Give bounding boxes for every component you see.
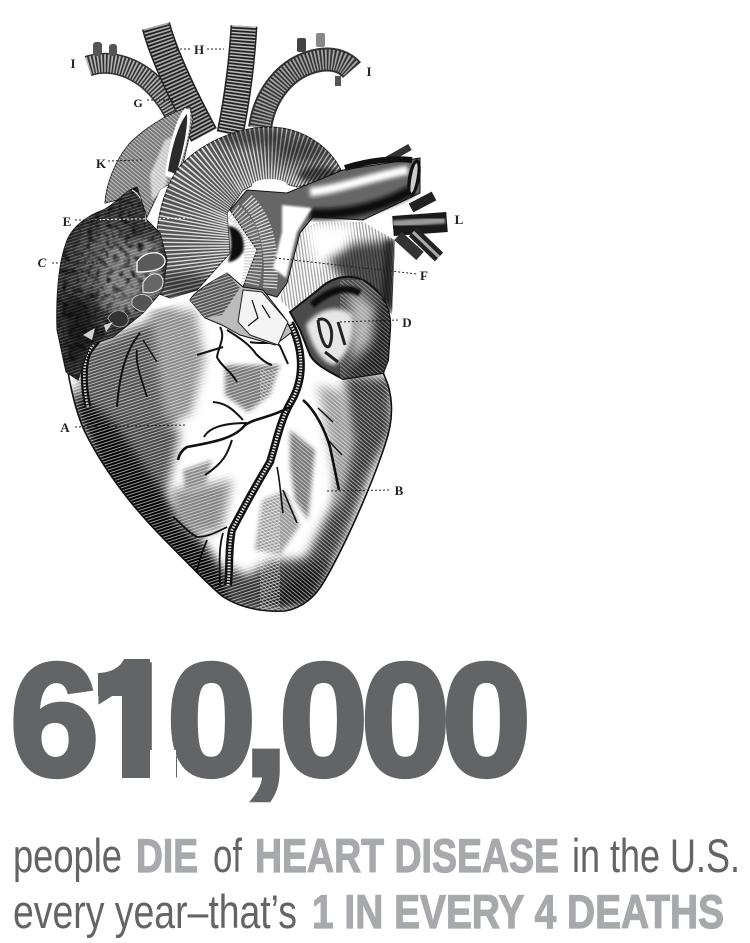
headline number: 610,000: [10, 630, 531, 809]
outline: ventricle silhouette: [68, 372, 392, 611]
vessel: right subclavian branch: [260, 33, 352, 128]
lower coronary branches: [277, 467, 283, 513]
label E: E: [63, 214, 71, 229]
hole beneath the arch: [252, 179, 288, 193]
right coronary artery: [80, 332, 158, 408]
dark fold beside trunk: [228, 226, 244, 262]
label G: G: [133, 96, 143, 110]
label A: A: [60, 420, 70, 435]
vessel: pulmonary veins L: [387, 147, 447, 257]
panel: coronary arteries on the ventricle: [173, 323, 342, 587]
label B: B: [395, 483, 404, 498]
panel: pulmonary trunk: [228, 158, 423, 297]
diagonal coronary branch: [178, 407, 290, 460]
right marginal coronary branch: [303, 400, 339, 490]
label I right: I: [366, 64, 372, 79]
panel: conus region at base of pulmonary trunk: [190, 273, 292, 345]
label L: L: [455, 212, 464, 227]
text block: first caption line: DIE: [136, 829, 198, 882]
vessel: trachea left tube H: [156, 26, 204, 135]
vessel: superior vena cava K: [105, 107, 193, 217]
label F: F: [420, 268, 428, 283]
label I left: I: [70, 56, 76, 71]
text block: second caption line: every year–that’s: [13, 885, 297, 938]
label H: H: [194, 42, 204, 57]
vessel: trachea right tube H: [230, 26, 244, 134]
label D: D: [402, 315, 412, 330]
text block: first caption line: people: [13, 829, 122, 882]
label K: K: [96, 156, 107, 171]
hatching: engraved strokes: [70, 304, 280, 610]
left anterior descending artery: [228, 323, 301, 585]
text block: first caption line: HEART DISEASE: [255, 829, 559, 882]
opening of the pulmonary trunk: [405, 158, 423, 198]
upper coronary branches: [197, 327, 288, 382]
labels: engraving letter keys: [38, 42, 464, 498]
illustration: anatomical heart engraving: [50, 26, 447, 620]
text block: first caption line: of: [213, 829, 243, 882]
text block: first caption line: [13, 829, 740, 882]
panel: tissue behind auricle: [281, 222, 395, 315]
panel: aortic arch: [155, 127, 342, 300]
panel: left auricle D: [290, 277, 395, 380]
leader lines: dotted pointers: [52, 49, 417, 491]
panel: right atrium C: [56, 186, 168, 381]
label C: C: [38, 255, 47, 270]
vessel: left subclavian branch: [88, 42, 176, 118]
panel: right ventricle and left ventricle: [70, 302, 391, 610]
text block: second caption line: [13, 885, 724, 938]
shading: main ventricle tone: [68, 310, 392, 615]
